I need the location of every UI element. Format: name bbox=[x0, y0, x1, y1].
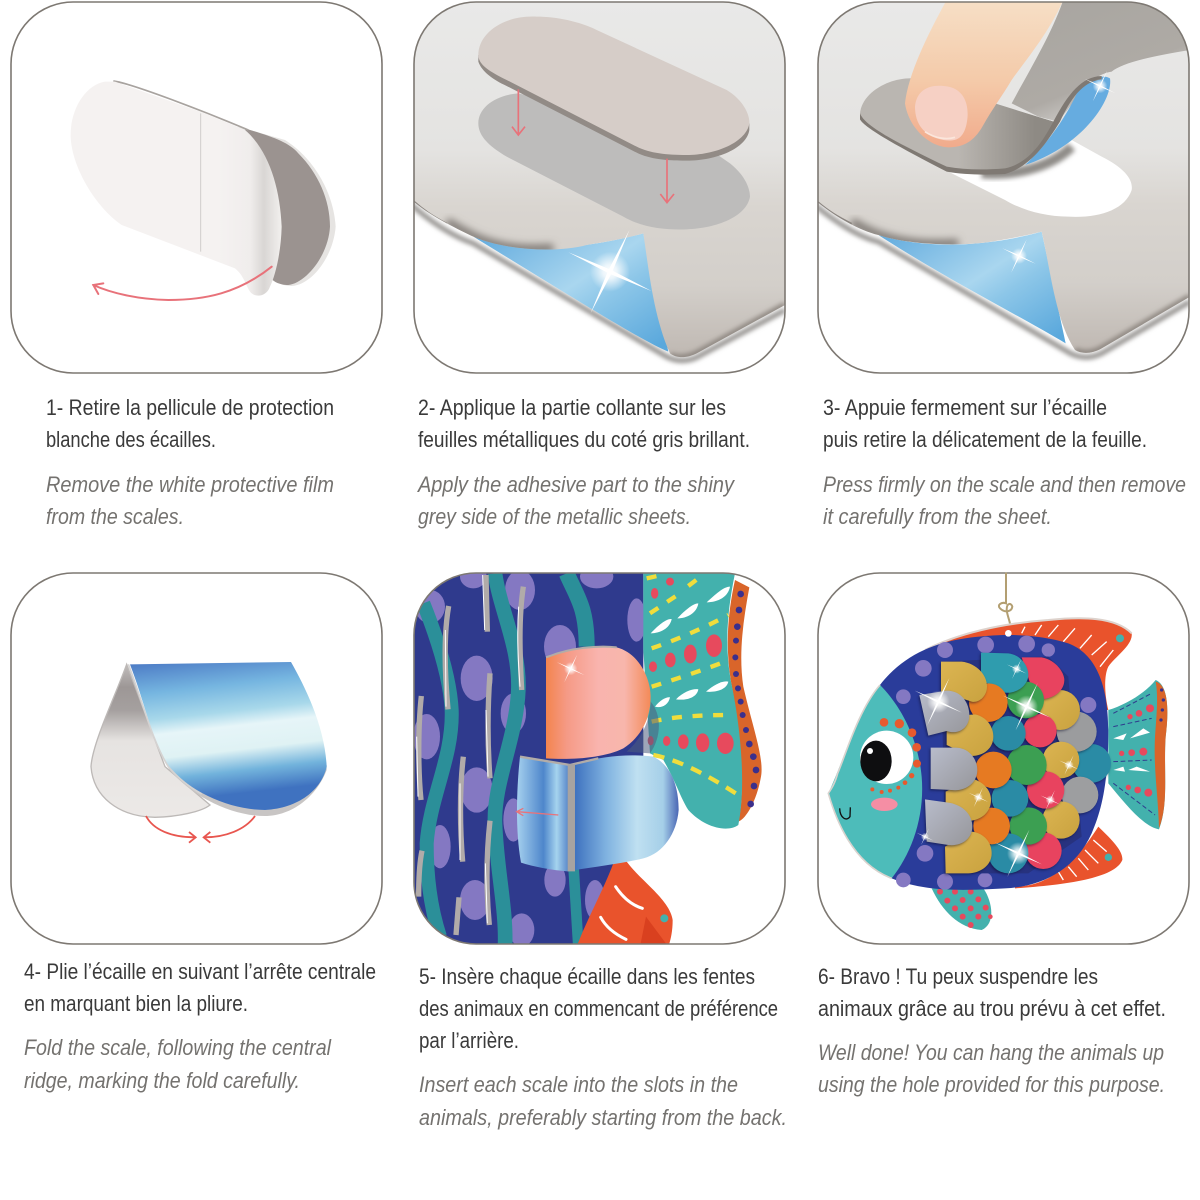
bottom teal fin bbox=[932, 888, 993, 930]
caption 3: it carefully from the sheet. bbox=[823, 504, 1052, 529]
navy body bbox=[880, 635, 1108, 890]
caption 5 bbox=[419, 964, 787, 1130]
teal fin bbox=[643, 573, 742, 829]
red bottom fin bbox=[577, 862, 673, 947]
caption 5: des animaux en commencant de préférence bbox=[419, 996, 778, 1021]
red arrow bbox=[517, 808, 558, 816]
panel 2: apply adhesive to the sheet bbox=[410, 0, 785, 373]
shadow under the sheet bbox=[815, 205, 1190, 357]
sparkle bbox=[569, 231, 652, 313]
caption 3: 3- Appuie fermement sur l’écaille bbox=[823, 395, 1107, 420]
caption 4: en marquant bien la pliure. bbox=[24, 991, 248, 1016]
peach scale bbox=[546, 647, 651, 759]
caption 6: using the hole provided for this purpose. bbox=[818, 1072, 1165, 1097]
caption 2 bbox=[416, 395, 750, 529]
caption 6: animaux grâce au trou prévu à cet effet. bbox=[818, 996, 1166, 1021]
shadow under the lifted scale bbox=[982, 147, 1072, 174]
panel 5: insert the scales bbox=[414, 574, 762, 944]
cheek bbox=[871, 798, 898, 811]
orange edge with purple dots bbox=[728, 580, 762, 822]
fold ridge edge bbox=[128, 664, 202, 794]
caption 3: puis retire la délicatement de la feuille. bbox=[823, 427, 1147, 452]
peeled darker area bbox=[1012, 0, 1190, 122]
caption 1: blanche des écailles. bbox=[46, 427, 216, 452]
caption 4 bbox=[24, 959, 376, 1093]
caption 4: ridge, marking the fold carefully. bbox=[24, 1068, 300, 1093]
hanging string bbox=[999, 573, 1012, 632]
caption 6: 6- Bravo ! Tu peux suspendre les bbox=[818, 964, 1098, 989]
caption 1: 1- Retire la pellicule de protection bbox=[46, 395, 334, 420]
panel 4: fold the scale bbox=[11, 573, 382, 944]
red curved arrow bbox=[93, 267, 272, 300]
white slit highlights bbox=[417, 575, 520, 923]
tail fin bbox=[1108, 680, 1167, 829]
caption 2: Apply the adhesive part to the shiny bbox=[416, 472, 736, 497]
hanging hole bbox=[1005, 630, 1012, 637]
caption 1: Remove the white protective film bbox=[46, 472, 334, 497]
eye bbox=[860, 731, 913, 784]
caption 3 bbox=[823, 395, 1186, 529]
caption 4: Fold the scale, following the central bbox=[24, 1035, 332, 1060]
fold shading bbox=[815, 200, 1190, 353]
caption 2: 2- Applique la partie collante sur les bbox=[418, 395, 726, 420]
panel 5 frame bbox=[414, 573, 785, 944]
sparkles bbox=[995, 64, 1122, 280]
back flap bbox=[91, 664, 210, 817]
white hole bbox=[948, 140, 1132, 217]
silver slits bbox=[419, 575, 523, 935]
caption 5: 5- Insère chaque écaille dans les fentes bbox=[419, 964, 755, 989]
red down arrows bbox=[512, 89, 674, 203]
caption 5: animals, preferably starting from the back. bbox=[419, 1105, 787, 1130]
caption 5: par l’arrière. bbox=[419, 1028, 519, 1053]
panel 1: remove the protective film bbox=[11, 2, 382, 373]
eye dots bbox=[870, 718, 921, 794]
caption 6: Well done! You can hang the animals up bbox=[818, 1040, 1164, 1065]
finger bbox=[905, 0, 1063, 147]
sparkles bbox=[904, 655, 1083, 888]
metallic sheet grey side bbox=[410, 0, 785, 357]
shadow under the sheet bbox=[410, 203, 785, 361]
panel 3 frame bbox=[818, 2, 1189, 373]
scales bbox=[919, 653, 1111, 873]
blue metallic underside bbox=[473, 233, 668, 352]
teal waves bbox=[423, 573, 587, 947]
blue metallic underside bbox=[878, 232, 1066, 343]
grey adhesive scale bbox=[478, 17, 749, 161]
face outline bbox=[828, 685, 892, 878]
front flap edge bbox=[168, 765, 327, 816]
teal face bbox=[828, 685, 922, 878]
red arrows bbox=[146, 816, 255, 843]
shadow bbox=[627, 702, 659, 753]
panel 6: finished fish bbox=[818, 573, 1189, 944]
fold shading bbox=[410, 198, 785, 357]
caption 2: feuilles métalliques du coté gris brillant. bbox=[418, 427, 750, 452]
caption 2: grey side of the metallic sheets. bbox=[418, 504, 691, 529]
scale top edge bbox=[113, 81, 248, 130]
rounded back of the scale bbox=[238, 127, 336, 286]
purple polka dots bbox=[413, 565, 646, 947]
caption 6 bbox=[818, 964, 1166, 1097]
navy body bbox=[410, 570, 643, 950]
caption 4: 4- Plie l’écaille en suivant l’arrête centrale bbox=[24, 959, 376, 984]
panel 3: press and peel off bbox=[815, 0, 1190, 373]
caption 1: from the scales. bbox=[46, 504, 184, 529]
white protective film bbox=[71, 82, 282, 296]
caption 1 bbox=[46, 395, 334, 529]
anal orange fin bbox=[1015, 827, 1122, 888]
scale bbox=[860, 76, 1102, 175]
panel 2 frame bbox=[414, 2, 785, 373]
blue metallic front flap bbox=[130, 662, 327, 810]
caption 5: Insert each scale into the slots in the bbox=[419, 1072, 738, 1097]
polka dots bbox=[896, 636, 1096, 890]
blue curl bbox=[1025, 77, 1110, 165]
mouth bbox=[840, 807, 850, 819]
sheet bbox=[815, 0, 1190, 353]
stadium-shaped imprint bbox=[478, 93, 750, 229]
blue folded scale bbox=[517, 755, 679, 872]
central fold line bbox=[199, 113, 202, 252]
dorsal orange fin bbox=[925, 618, 1132, 710]
